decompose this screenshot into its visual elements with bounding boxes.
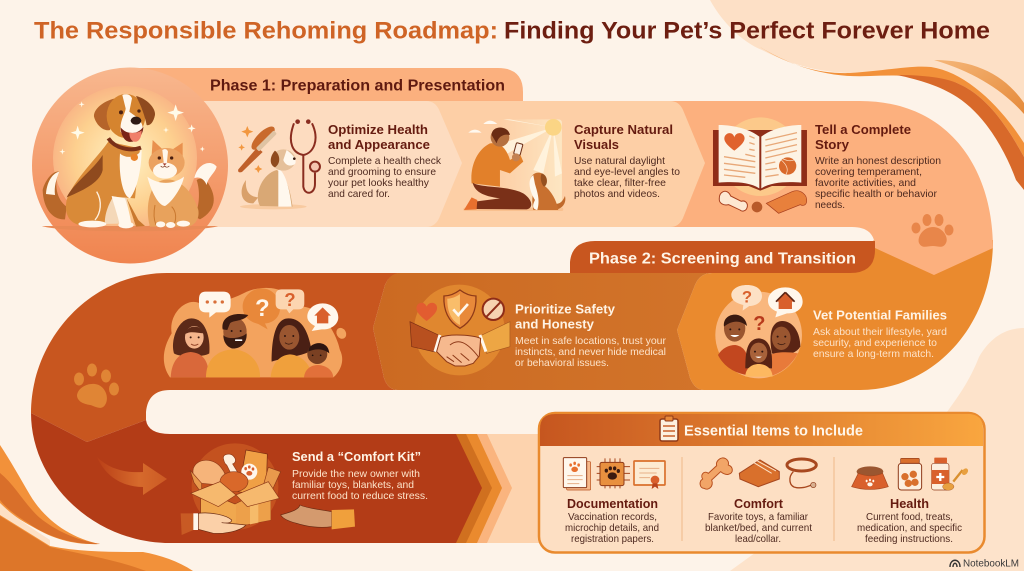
icons: bone, blanket, collar <box>700 458 816 489</box>
top right peach corner <box>710 0 1024 145</box>
text: prioritize safety: Meet in safe locations, trust your <box>515 335 666 347</box>
panel: comfort kit band <box>31 413 482 543</box>
text: tell a complete story: Tell a Complete <box>815 122 911 137</box>
icon: family circle <box>715 285 803 378</box>
column: documentation: microchip details, and <box>565 522 659 534</box>
text: optimize health: Complete a health check <box>328 155 442 167</box>
question bubble orange <box>243 288 280 329</box>
text: prioritize safety: instincts, and never hide medical <box>515 346 666 358</box>
bottom right peach shape <box>730 328 1024 571</box>
panel: comfort kit chevron, mid <box>440 434 492 543</box>
heading: comfort: Comfort <box>734 496 784 511</box>
orange base <box>0 515 193 571</box>
text: prioritize safety: Prioritize Safety <box>515 302 616 316</box>
text: vet potential families: Vet Potential Families <box>813 308 947 322</box>
column: comfort: lead/collar. <box>735 533 781 545</box>
panel: phase 2 band, safety segment <box>373 273 712 390</box>
text: tell a complete story: Write an honest description <box>815 155 941 167</box>
top right orange swoosh <box>760 47 1024 157</box>
text: send a comfort kit: Send a “Comfort Kit” <box>292 449 421 464</box>
icon: paw phase 2 <box>74 364 119 408</box>
receiving hand <box>281 505 355 529</box>
text: vet potential families <box>813 308 947 360</box>
text: prioritize safety: and Honesty <box>515 316 595 332</box>
hands <box>437 335 481 366</box>
dark base <box>0 516 146 571</box>
brush <box>238 123 279 172</box>
ball <box>779 157 796 175</box>
text: tell a complete story <box>815 122 941 211</box>
question bubble <box>731 285 762 311</box>
clouds <box>468 121 497 133</box>
illustration: families with questions: ? <box>284 289 296 310</box>
shirt cuffs <box>435 335 486 352</box>
red question: ? <box>753 313 765 335</box>
bag of food <box>238 450 267 497</box>
person <box>464 127 531 210</box>
backdrop circle <box>32 68 228 264</box>
heading: phase 2: Phase 2: Screening and Transition <box>589 250 856 268</box>
cuff right <box>480 322 510 353</box>
icon: paw phase 1 <box>912 214 954 247</box>
heading: phase 1: Phase 1: Preparation and Presentation <box>210 78 505 94</box>
title <box>34 18 990 44</box>
person: woman left <box>171 318 210 377</box>
text: capture natural visuals: photos and videos. <box>574 188 660 200</box>
text: tell a complete story: covering temperament, <box>815 166 922 178</box>
bone <box>223 454 238 475</box>
sun <box>545 119 562 136</box>
text: optimize health: and grooming to ensure <box>328 166 436 178</box>
giving hand <box>181 513 246 535</box>
column: health: medication, and specific <box>857 522 962 534</box>
cover <box>713 130 807 191</box>
darker inner swoosh <box>0 473 100 544</box>
illustration: families with questions <box>164 288 348 377</box>
sun disc <box>721 117 800 196</box>
logo icon <box>950 560 960 567</box>
icon: brush, stethoscope and puppy <box>238 119 320 209</box>
text: tell a complete story: needs. <box>815 199 845 211</box>
top right dark swoosh <box>897 75 1024 190</box>
text: optimize health: and cared for. <box>328 188 390 200</box>
icon: heart <box>416 303 437 321</box>
tab shape <box>570 241 875 273</box>
chicken toy <box>193 460 225 485</box>
sparkles <box>241 126 253 137</box>
text: prioritize safety: or behavioral issues. <box>515 357 609 369</box>
icon: handshake with shield, heart and no-hide sign <box>410 285 510 375</box>
top right pale swoosh <box>934 60 1024 114</box>
box flaps back <box>190 467 281 495</box>
cuff left <box>410 322 441 352</box>
icon: shield <box>444 290 476 328</box>
icon: no sign <box>483 299 504 320</box>
arrow: to comfort kit <box>97 457 167 495</box>
NotebookLM logo <box>950 558 1019 570</box>
pages <box>719 125 759 188</box>
phase 2 tab <box>570 241 875 273</box>
illustration: families with questions: ? <box>255 295 270 322</box>
panel body <box>539 413 984 552</box>
text: capture natural visuals: Visuals <box>574 137 619 152</box>
panel: comfort kit chevron, lightest <box>440 434 539 543</box>
illustration: dog and cat <box>32 68 228 264</box>
dog <box>530 173 565 210</box>
text: optimize health <box>328 122 442 200</box>
puppy <box>242 149 296 207</box>
small ball <box>752 202 762 212</box>
backdrop circle <box>192 443 278 530</box>
text: send a comfort kit: current food to reduce stress. <box>292 490 428 502</box>
icons: documents, chip, certificate <box>563 458 665 490</box>
bubble: house <box>307 303 338 331</box>
stethoscope <box>291 123 320 193</box>
bone <box>719 191 747 211</box>
title part one: The Responsible Rehoming Roadmap: <box>34 18 498 44</box>
person: man <box>206 314 260 377</box>
column: documentation: registration papers. <box>571 533 654 545</box>
person: girl <box>745 338 773 377</box>
heading: essential items: Essential Items to Include <box>684 422 863 440</box>
text: tell a complete story: specific health or behavior <box>815 188 937 200</box>
text: send a comfort kit: Provide the new owner with <box>292 468 420 480</box>
panel: comfort kit chevron, peach <box>440 434 512 543</box>
text: optimize health: and Appearance <box>328 137 430 152</box>
text: optimize health: your pet looks healthy <box>328 177 430 189</box>
panel: phase 2 band, vet segment <box>677 240 993 390</box>
text: capture natural visuals: Capture Natural <box>574 122 673 137</box>
panel: phase 2 band, families segment <box>31 273 400 442</box>
icon: person photographing a dog <box>463 119 565 211</box>
illustration: comfort kit box <box>181 443 355 535</box>
speech bubble dots <box>199 292 231 318</box>
phase 1 tab <box>130 68 523 101</box>
column: health <box>852 458 969 545</box>
text: vet potential families: Ask about their lifestyle, yard <box>813 326 947 338</box>
ball <box>220 472 248 492</box>
text lines <box>724 133 797 177</box>
text: capture natural visuals: Use natural daylight <box>574 155 665 167</box>
shadow <box>240 204 307 209</box>
backdrop circle <box>715 292 802 378</box>
box flaps front <box>191 482 236 507</box>
text: send a comfort kit <box>292 449 428 502</box>
heart <box>724 133 745 151</box>
text: send a comfort kit: familiar toys, blankets, and <box>292 479 414 491</box>
panel: phase 1 band, visuals segment <box>400 101 705 227</box>
ground <box>463 208 563 211</box>
column: health: feeding instructions. <box>865 533 953 545</box>
pets <box>43 94 217 228</box>
text: prioritize safety <box>515 302 666 369</box>
panel: comfort kit chevron, orange <box>440 434 502 543</box>
ground <box>42 226 218 231</box>
panel: essential items <box>539 413 984 552</box>
column: comfort <box>700 458 816 545</box>
glow <box>53 86 197 230</box>
house bubble <box>768 287 803 317</box>
box body <box>201 487 271 527</box>
icon: open story book <box>713 117 807 213</box>
text: capture natural visuals: and eye-level angles to <box>574 166 680 178</box>
person: woman right <box>271 318 312 377</box>
heading: health: Health <box>890 496 929 511</box>
icon: clipboard <box>660 416 678 441</box>
column: comfort: Favorite toys, a familiar <box>708 511 808 523</box>
panel header <box>540 414 983 446</box>
text: tell a complete story: Story <box>815 137 850 152</box>
text: capture natural visuals <box>574 122 680 200</box>
text: vet potential families: ensure a long-term match. <box>813 348 934 360</box>
person: child <box>304 343 333 377</box>
text: vet potential families: security, and experience to <box>813 337 937 349</box>
tab shape <box>130 68 523 101</box>
panel: phase 1 band, story segment <box>205 101 993 275</box>
bottom left swoosh layers <box>0 445 193 571</box>
backdrop blob <box>164 288 342 377</box>
rays <box>502 119 562 177</box>
small dot <box>334 326 348 341</box>
text: optimize health: Optimize Health <box>328 122 428 137</box>
icon: family circle: ? <box>742 288 752 307</box>
question bubble peach <box>276 289 304 313</box>
panel: phase 1 band, health segment <box>203 101 462 227</box>
pale stripe <box>0 503 50 546</box>
heading: documentation: Documentation <box>567 496 658 511</box>
title part two: Finding Your Pet’s Perfect Forever Home <box>504 18 990 44</box>
column: comfort: blanket/bed, and current <box>705 522 812 534</box>
text: capture natural visuals: take clear, filter-free <box>574 177 666 189</box>
column: health: Current food, treats, <box>866 511 953 523</box>
person: woman <box>770 321 800 376</box>
rolled blanket <box>766 191 807 213</box>
sunlight <box>500 119 562 210</box>
orange outer swoosh <box>0 445 100 544</box>
column: documentation: Vaccination records, <box>568 511 657 523</box>
logo text: NotebookLM <box>963 558 1019 570</box>
text: tell a complete story: favorite activities, and <box>815 177 916 189</box>
backdrop circle <box>414 285 505 375</box>
column: documentation <box>563 458 665 545</box>
person: man <box>718 315 748 375</box>
icons: bowl, jar, medicine and spoon <box>852 458 969 490</box>
